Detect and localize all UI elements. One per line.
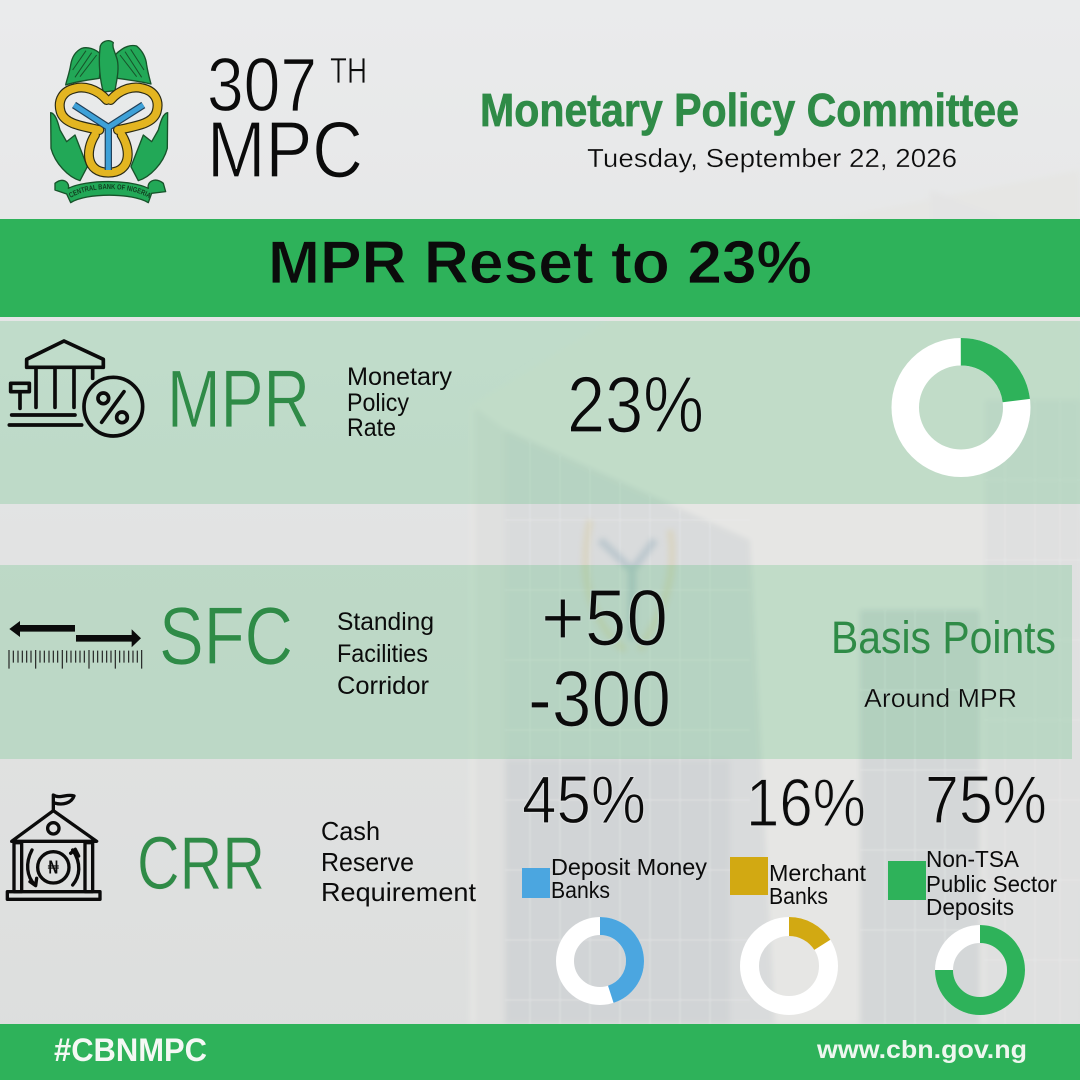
label: Monetary Policy Rate: Rate: [347, 414, 396, 442]
panel: SFC band: [0, 565, 1072, 759]
date: Tuesday, September 22, 2026: [587, 143, 957, 173]
value: +50 -300: -300: [528, 654, 671, 743]
title banner: [0, 219, 1080, 317]
heading: 307TH MPC: TH: [330, 50, 367, 91]
footer bar: [0, 1024, 1080, 1080]
title banner: MPR Reset to 23%: [268, 229, 812, 296]
legend: Non-TSA Public Sector Deposits: Public Sector: [926, 871, 1057, 897]
group: Deposit Money Banks: [522, 762, 707, 996]
label: Around MPR: Around MPR: [864, 683, 1017, 713]
legend: Merchant Banks: Merchant: [769, 860, 867, 886]
panel: MPR band: [0, 321, 1080, 504]
icon: bank with percent: [9, 341, 143, 436]
row: CRR: [0, 762, 1080, 1080]
label: Monetary Policy Rate: [347, 363, 452, 442]
label: Monetary Policy Rate: Policy: [347, 389, 409, 417]
faint emblem on the building: [585, 520, 672, 650]
icon: bank with naira: [7, 795, 100, 899]
heading: Monetary Policy Committee: Monetary Policy Committee: [480, 84, 1019, 136]
label: Standing Facilities Corridor: Corridor: [337, 672, 429, 700]
emblem: Central Bank of Nigeria logo: CENTRAL BANK OF NIGERIA: [69, 184, 150, 198]
label: Cash Reserve Requirement: Cash: [321, 816, 380, 846]
donut: MPR 23%: [905, 352, 1017, 463]
donut: 45%: [565, 926, 635, 996]
legend: Deposit Money Banks: Deposit Money: [551, 854, 707, 880]
emblem: Central Bank of Nigeria logo: [50, 40, 168, 204]
value: 23%: 23%: [567, 360, 704, 449]
website: www.cbn.gov.ng: [816, 1036, 1027, 1064]
legend: Non-TSA Public Sector Deposits: Deposits: [926, 894, 1014, 920]
value: 16%: 16%: [746, 765, 866, 841]
legend: Deposit Money Banks: Banks: [551, 877, 610, 903]
icon: bank with naira: ₦: [48, 858, 60, 879]
row: MPR: [9, 341, 1017, 463]
label: Cash Reserve Requirement: [321, 816, 477, 907]
donut: 16%: [750, 926, 828, 1006]
value: +50 -300: +50: [541, 573, 668, 662]
value: 45%: 45%: [522, 762, 646, 838]
heading: 307TH MPC: 307: [207, 43, 317, 128]
label: Cash Reserve Requirement: Requirement: [321, 877, 477, 907]
legend: Merchant Banks: Banks: [769, 883, 828, 909]
heading: 307TH MPC: MPC: [207, 105, 363, 194]
legend: Deposit Money Banks: [522, 854, 707, 903]
legend: Merchant Banks: [730, 857, 867, 909]
label: CRR: CRR: [137, 821, 265, 905]
legend: Non-TSA Public Sector Deposits: Non-TSA: [926, 846, 1020, 872]
label: Monetary Policy Rate: Monetary: [347, 363, 452, 391]
group: Merchant Banks: [730, 765, 867, 1006]
value: +50 -300: [528, 573, 671, 743]
label: Standing Facilities Corridor: Facilities: [337, 640, 428, 668]
label: MPR: MPR: [167, 354, 310, 445]
row: SFC: [9, 573, 1056, 743]
heading: 307TH MPC: [207, 43, 367, 194]
donut: 75%: [944, 934, 1016, 1006]
value: 75%: 75%: [925, 762, 1047, 838]
label: SFC: SFC: [159, 591, 293, 682]
icon: corridor arrows and ruler: [9, 621, 142, 669]
hashtag: #CBNMPC: [54, 1032, 207, 1068]
legend: Non-TSA Public Sector Deposits: [888, 846, 1057, 920]
label: Standing Facilities Corridor: [337, 608, 434, 700]
group: Non-TSA Public Sector Deposits: [888, 762, 1057, 1006]
label: Basis Points: Basis Points: [831, 612, 1056, 663]
label: Cash Reserve Requirement: Reserve: [321, 847, 414, 877]
label: Standing Facilities Corridor: Standing: [337, 608, 434, 636]
